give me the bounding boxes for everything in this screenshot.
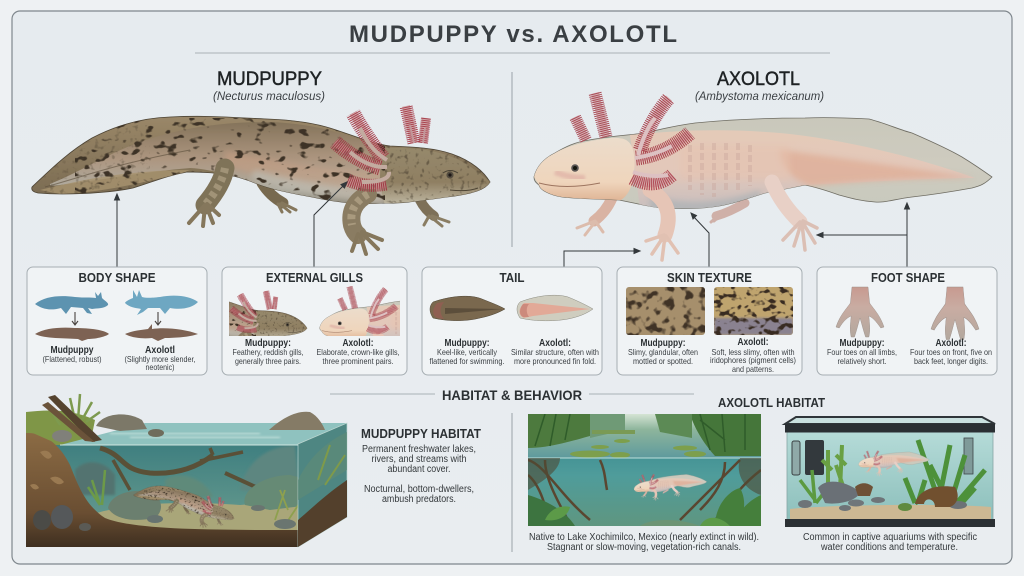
- top rim: [785, 418, 995, 432]
- card: skin texture: Axolotl:: [738, 337, 768, 348]
- title: MUDPUPPY vs. AXOLOTL: [349, 21, 677, 48]
- lily pads: [570, 439, 706, 458]
- card: external gills: EXTERNAL GILLS: [266, 270, 363, 285]
- card: skin texture: Soft, less slimy, often with: [712, 347, 795, 357]
- arrow: body shape: [114, 194, 120, 267]
- card: foot shape: [817, 267, 997, 375]
- illustration: mudpuppy: [30, 106, 495, 254]
- card: external gills: Elaborate, crown-like gills,: [316, 347, 400, 357]
- card: tail: Mudpuppy:: [444, 338, 490, 349]
- rocks: [96, 414, 147, 431]
- heading: mudpuppy: [213, 69, 325, 103]
- card: tail: more pronounced fin fold.: [514, 356, 596, 366]
- card: external gills: generally three pairs.: [235, 356, 301, 366]
- text: aquarium caption: Common in captive aquariums with specific: [803, 532, 977, 543]
- card: tail: TAIL: [500, 270, 525, 285]
- text: aquarium caption: water conditions and temperature.: [820, 542, 958, 553]
- card: tail: Keel-like, vertically: [437, 347, 498, 357]
- axolotl skin swatch: [714, 287, 793, 335]
- heading: axolotl habitat: AXOLOTL HABITAT: [718, 395, 825, 410]
- axolotl top silhouette: [125, 290, 198, 315]
- mudpuppy skin swatch: [626, 287, 705, 335]
- card: foot shape: Four toes on front, five on: [910, 347, 992, 357]
- text: mudpuppy habitat: MUDPUPPY HABITAT: [361, 426, 481, 441]
- text: mudpuppy habitat: [361, 426, 481, 505]
- card: external gills: three prominent pairs.: [322, 356, 394, 366]
- roots: [528, 460, 761, 526]
- card: tail: Similar structure, often with: [511, 347, 599, 357]
- card: body shape: Axolotl: [145, 345, 175, 356]
- arrow: skin texture: [691, 213, 709, 267]
- arrow: external gills: [314, 182, 347, 267]
- card: skin texture: Mudpuppy:: [640, 338, 686, 349]
- heading: axolotl: [695, 69, 824, 103]
- mudpuppy foot: [836, 287, 884, 337]
- text: mudpuppy habitat: Nocturnal, bottom-dwellers,: [364, 484, 474, 495]
- soil: [26, 433, 298, 547]
- filter: [805, 440, 824, 475]
- card: tail: [422, 267, 602, 375]
- rocks and cave: [818, 482, 860, 504]
- card: skin texture: and patterns.: [732, 364, 774, 374]
- card: tail: flattened for swimming.: [430, 356, 504, 366]
- mudpuppy head crop: [229, 290, 308, 336]
- card: foot shape: FOOT SHAPE: [871, 270, 945, 285]
- text: lake caption: Stagnant or slow-moving, vegetation-rich canals.: [547, 542, 741, 553]
- text: lake caption: [529, 532, 759, 553]
- card: external gills: Axolotl:: [342, 338, 374, 349]
- card: body shape: BODY SHAPE: [78, 270, 156, 285]
- heading: axolotl: (Ambystoma mexicanum): [695, 91, 824, 103]
- tank water: [787, 432, 993, 520]
- heading: mudpuppy: (Necturus maculosus): [213, 91, 325, 103]
- underwater scene: [26, 433, 310, 547]
- text: aquarium caption: [803, 532, 977, 553]
- heading: habitat and behavior: HABITAT & BEHAVIOR: [442, 387, 582, 403]
- text: mudpuppy habitat: ambush predators.: [382, 494, 456, 505]
- grass and bank: [26, 410, 95, 445]
- axolotl in tank: [858, 447, 930, 477]
- mudpuppy tail: [430, 296, 505, 321]
- text: mudpuppy habitat: abundant cover.: [388, 464, 450, 475]
- arrows from feature cards to animals: [114, 182, 910, 267]
- plants: [822, 445, 846, 495]
- card: external gills: [222, 266, 408, 376]
- arrow: foot shape: [817, 203, 910, 267]
- card: foot shape: Axolotl:: [936, 338, 966, 349]
- reeds: [528, 414, 590, 448]
- text: lake caption: Native to Lake Xochimilco, Mexico (nearly extinct in wild).: [529, 532, 759, 543]
- text: mudpuppy habitat: rivers, and streams with: [372, 454, 466, 465]
- card: foot shape: Four toes on all limbs,: [827, 347, 897, 357]
- card: foot shape: relatively short.: [838, 356, 886, 366]
- arrows down: [72, 312, 161, 325]
- card: body shape: neotenic): [146, 362, 175, 372]
- card: external gills: Feathery, reddish gills,: [232, 347, 304, 357]
- water surface: [60, 423, 347, 445]
- illustration: mudpuppy habitat diorama: [26, 394, 347, 547]
- sky and surface: [528, 414, 761, 458]
- axolotl in lake: [634, 474, 707, 501]
- heading: axolotl: AXOLOTL: [717, 69, 800, 90]
- mudpuppy on bed: [130, 477, 239, 534]
- foreground leaves: [528, 495, 575, 526]
- card: skin texture: Slimy, glandular, often: [628, 347, 698, 357]
- sand bed: [98, 503, 298, 530]
- axolotl foot: [931, 287, 979, 340]
- logs: [48, 395, 102, 442]
- card: tail: Axolotl:: [539, 338, 571, 349]
- card: body shape: (Slightly more slender,: [124, 354, 196, 364]
- diorama right face: [298, 423, 347, 547]
- card: foot shape: Mudpuppy:: [840, 338, 884, 349]
- card: external gills: Mudpuppy:: [245, 338, 291, 349]
- arrow: tail: [564, 248, 640, 267]
- card: body shape: [27, 267, 207, 375]
- mudpuppy profile: [35, 328, 109, 341]
- axolotl tail: [517, 295, 593, 321]
- card: skin texture: SKIN TEXTURE: [667, 270, 752, 285]
- card: skin texture: iridophores (pigment cells): [710, 355, 796, 365]
- axolotl profile: [125, 324, 198, 341]
- heading: mudpuppy: MUDPUPPY: [217, 69, 322, 90]
- text: mudpuppy habitat: Permanent freshwater lakes,: [362, 444, 476, 455]
- card: skin texture: [617, 267, 802, 375]
- card: foot shape: back feet, longer digits.: [914, 356, 988, 366]
- substrate: [790, 505, 991, 519]
- illustration: lake xochimilco: [528, 414, 761, 526]
- illustration: axolotl: [534, 93, 992, 260]
- card: body shape: Mudpuppy: [50, 345, 94, 356]
- axolotl head crop: [319, 286, 400, 336]
- illustration: aquarium: [785, 417, 995, 527]
- card: skin texture: mottled or spotted.: [633, 356, 693, 366]
- mudpuppy top silhouette: [35, 292, 108, 314]
- card: body shape: (Flattened, robust): [42, 354, 102, 364]
- bottom frame: [785, 519, 995, 527]
